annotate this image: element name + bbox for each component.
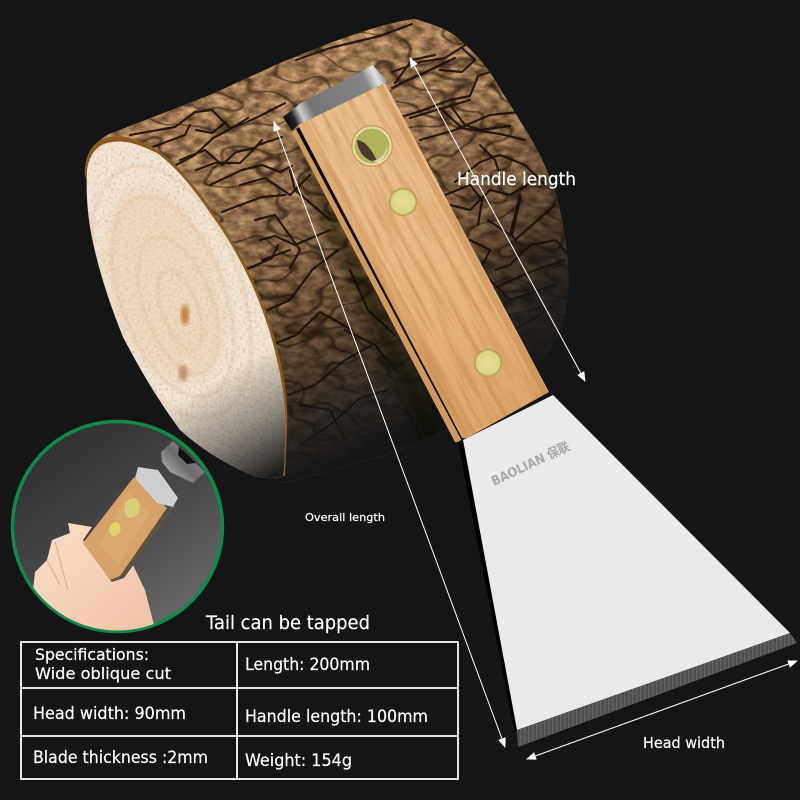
cell: weight: Weight: 154g	[245, 751, 352, 770]
handle side strip	[292, 128, 467, 442]
handle cast shadow	[285, 130, 450, 445]
handle wood face	[298, 83, 549, 438]
inset large hole	[124, 498, 140, 518]
bark shading	[174, 32, 568, 483]
upper rivet	[389, 188, 417, 216]
large hole	[351, 125, 393, 167]
cell: handle length: Handle length: 100mm	[245, 707, 428, 726]
label: head width: Head width	[643, 734, 725, 752]
bark cracks	[130, 24, 568, 445]
inset handle side	[110, 506, 176, 582]
cell: specifications: Wide oblique cut	[35, 664, 171, 683]
handle edge shading	[298, 120, 475, 440]
cut face grain	[86, 142, 285, 470]
cell: length: Length: 200mm	[245, 655, 370, 674]
inset metal cap	[135, 467, 178, 507]
knot lower	[178, 365, 188, 381]
log with bark	[60, 10, 580, 490]
cell: specifications: Specifications:	[35, 645, 149, 664]
brand logo: BAOLIAN 保联	[489, 439, 572, 490]
arrow: overall length	[274, 122, 505, 747]
lower rivet	[474, 349, 502, 377]
label: handle length: Handle length	[457, 169, 576, 190]
bark texture	[80, 10, 580, 490]
wood grain	[298, 84, 548, 440]
procedural cracks	[142, 24, 567, 482]
handle black liner	[296, 127, 466, 441]
bark right edge shading	[492, 152, 568, 364]
hammer socket	[178, 447, 196, 464]
blade	[458, 395, 797, 747]
inset handle wood	[83, 477, 167, 580]
knot upper	[181, 305, 189, 325]
growth rings	[90, 164, 253, 420]
cell: head width: Head width: 90mm	[33, 704, 186, 723]
inset rivet	[109, 522, 120, 536]
handle	[283, 65, 549, 442]
inset: tail tapping	[12, 422, 222, 640]
table grid	[21, 642, 458, 779]
arrow: head width	[527, 661, 797, 759]
cut face	[86, 142, 286, 478]
inset wood highlight	[100, 492, 150, 565]
metal end cap	[283, 65, 387, 131]
label: overall length: Overall length	[305, 511, 385, 524]
hand	[33, 523, 154, 630]
blade shadow line	[458, 440, 517, 731]
hammer	[161, 441, 205, 483]
blade face	[463, 395, 790, 730]
cut face rim	[85, 137, 287, 476]
specifications table	[21, 642, 458, 779]
blade bevel	[517, 633, 797, 747]
finger creases	[47, 542, 68, 590]
face fade	[168, 350, 286, 478]
warm centre	[103, 187, 228, 383]
cell: blade thickness: Blade thickness :2mm	[33, 748, 208, 767]
caption: tail can be tapped: Tail can be tapped	[205, 612, 370, 634]
arrow: handle length	[410, 58, 585, 381]
